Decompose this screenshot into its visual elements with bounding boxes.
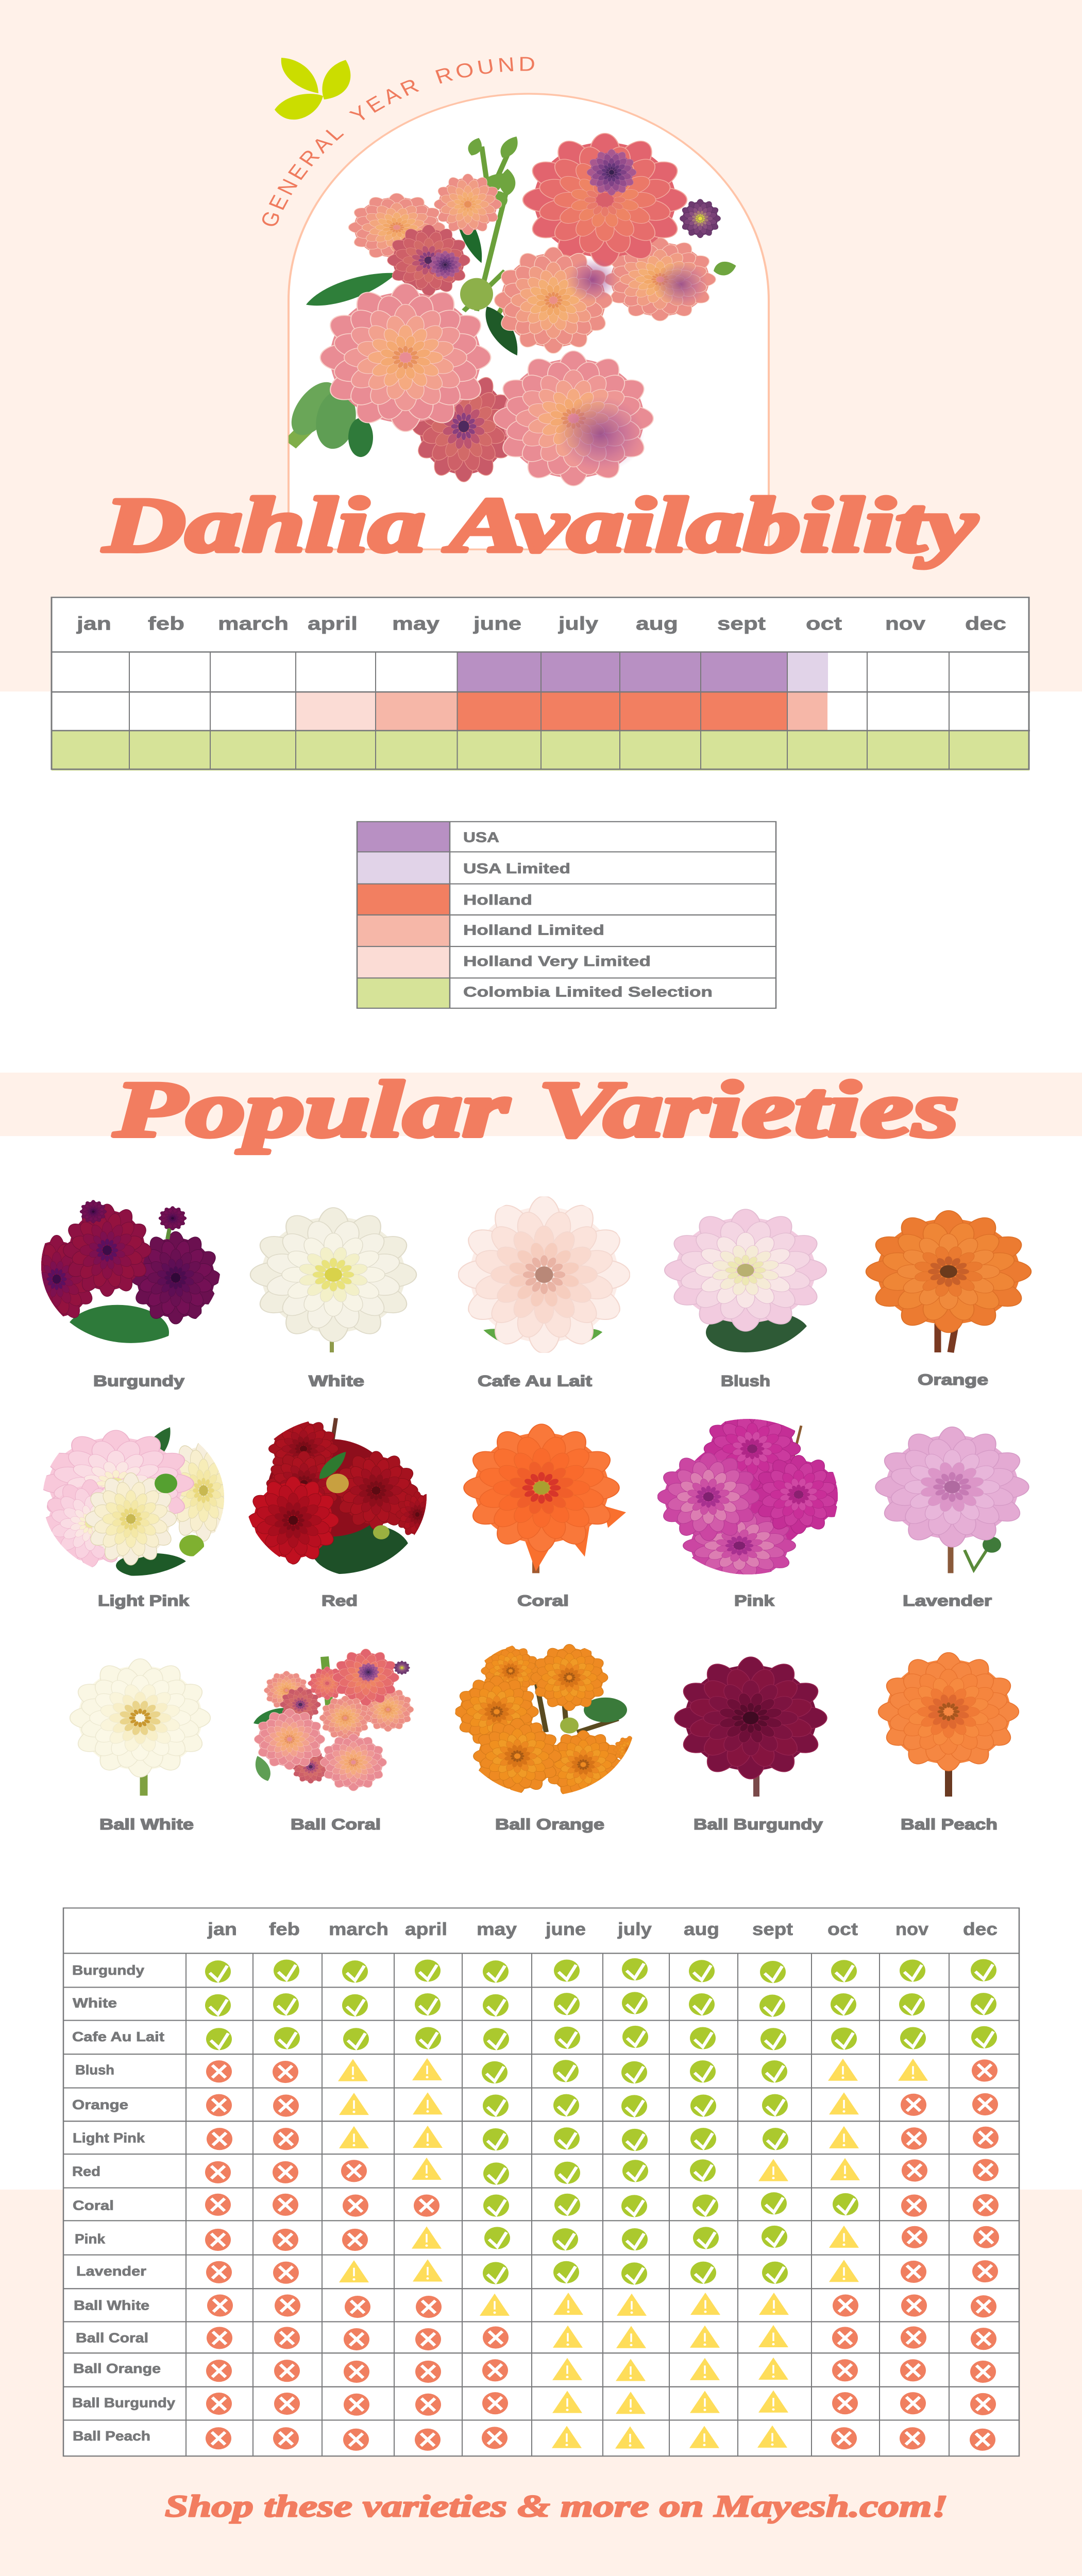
calendar month labels: jan [76, 614, 111, 634]
variety: pink: Pink [734, 1592, 774, 1609]
variety: pink [657, 1419, 838, 1606]
variety: cafe au lait: Cafe Au Lait [478, 1372, 593, 1389]
variety: red [247, 1418, 439, 1609]
variety: ball coral [251, 1649, 415, 1833]
variety: light pink: Light Pink [98, 1592, 189, 1609]
row: red: Red [72, 2164, 100, 2179]
legend labels: USA Limited [463, 861, 570, 876]
calendar month labels: april [308, 614, 358, 634]
variety: orange [866, 1210, 1032, 1388]
legend labels: Colombia Limited Selection [463, 984, 713, 1000]
variety: burgundy [41, 1200, 220, 1390]
row: pink [75, 2226, 999, 2251]
heading: popular varieties: Popular Varieties [113, 1065, 959, 1154]
variety: cafe au lait [458, 1196, 630, 1389]
table month labels: aug [684, 1919, 719, 1939]
calendar colour blocks [52, 652, 1029, 771]
calendar month labels: nov [885, 614, 925, 634]
variety: lavender [875, 1427, 1029, 1609]
table month labels: feb [269, 1919, 300, 1939]
variety: ball peach: Ball Peach [901, 1816, 998, 1833]
variety: orange: Orange [918, 1371, 988, 1388]
variety: ball peach [875, 1650, 1022, 1833]
variety: burgundy: Burgundy [93, 1372, 184, 1389]
calendar month labels: feb [148, 614, 184, 634]
row: white: White [73, 1995, 117, 2010]
row: ball orange: Ball Orange [73, 2361, 161, 2376]
variety: ball orange: Ball Orange [495, 1816, 604, 1833]
row: ball burgundy [72, 2391, 996, 2416]
row: cafe au lait: Cafe Au Lait [72, 2029, 164, 2044]
variety: light pink [43, 1427, 224, 1609]
row: burgundy: Burgundy [72, 1963, 144, 1977]
calendar month labels: july [558, 614, 598, 634]
icon: green leaves logo [275, 58, 350, 120]
row: coral [73, 2192, 999, 2217]
variety: white: White [309, 1372, 364, 1389]
table month labels: april [405, 1919, 447, 1939]
table month labels: jan [207, 1919, 237, 1939]
row: orange: Orange [72, 2097, 128, 2112]
curved text: general year round: GENERAL YEAR ROUND [262, 57, 534, 226]
row: ball white: Ball White [74, 2298, 149, 2313]
availability calendar table [52, 597, 1030, 771]
variety: blush: Blush [721, 1372, 770, 1389]
variety availability table [63, 1908, 1019, 2456]
hero flower bouquet [282, 133, 738, 489]
row: red [72, 2158, 999, 2185]
table month labels: may [477, 1919, 517, 1939]
row: ball orange [73, 2358, 996, 2383]
calendar month labels: aug [636, 614, 678, 634]
variety: white [250, 1208, 417, 1389]
variety: ball orange [453, 1642, 647, 1833]
row: light pink [73, 2126, 999, 2151]
variety: blush [664, 1209, 827, 1389]
variety: ball burgundy [674, 1657, 827, 1833]
row: cafe au lait [72, 2026, 997, 2050]
variety: lavender: Lavender [903, 1592, 992, 1609]
table month labels: nov [895, 1919, 928, 1939]
variety: red: Red [322, 1592, 358, 1609]
table month labels: july [617, 1919, 652, 1939]
table month labels: oct [827, 1919, 858, 1939]
row: ball peach: Ball Peach [73, 2429, 150, 2444]
row: lavender: Lavender [76, 2264, 146, 2279]
page background: top peach panel [0, 0, 1082, 691]
row: blush [75, 2058, 998, 2083]
row: coral: Coral [73, 2198, 114, 2213]
row: ball coral [76, 2325, 996, 2350]
calendar month labels: june [473, 614, 521, 634]
variety: ball white [66, 1656, 214, 1833]
row: white [73, 1992, 996, 2017]
legend labels [463, 829, 713, 1000]
legend labels: Holland Limited [463, 923, 604, 938]
legend labels: Holland Very Limited [463, 954, 651, 969]
variety: coral [464, 1424, 626, 1609]
row: lavender [76, 2259, 998, 2284]
table month labels: june [545, 1919, 586, 1939]
row: orange [72, 2092, 998, 2117]
row: ball burgundy: Ball Burgundy [72, 2395, 175, 2410]
legend [357, 822, 776, 1008]
table month labels: march [329, 1919, 388, 1939]
title: dahlia availability: Dahlia Availability [102, 482, 977, 568]
row: ball peach [73, 2426, 995, 2451]
row: blush: Blush [75, 2063, 114, 2077]
hero arch [289, 94, 769, 549]
row: burgundy [72, 1958, 996, 1983]
calendar month labels: sept [717, 614, 766, 634]
calendar month labels [76, 614, 1006, 634]
row: pink: Pink [75, 2231, 105, 2246]
variety: ball white: Ball White [99, 1816, 194, 1833]
legend labels: Holland [463, 892, 532, 908]
popular varieties band [0, 1073, 1082, 1136]
table month labels: sept [752, 1919, 793, 1939]
table month labels: dec [963, 1919, 998, 1939]
legend labels: USA [463, 829, 499, 845]
calendar month labels: may [392, 614, 439, 634]
calendar month labels: march [218, 614, 289, 634]
bottom peach panel [0, 2190, 1082, 2576]
row: ball coral: Ball Coral [76, 2330, 148, 2345]
call to action: Shop these varieties & more on Mayesh.com! [165, 2489, 948, 2523]
row: ball white [74, 2293, 996, 2318]
calendar month labels: oct [806, 614, 842, 634]
variety: coral: Coral [517, 1592, 569, 1609]
row: light pink: Light Pink [73, 2131, 145, 2145]
table month labels [207, 1919, 998, 1939]
variety: ball coral: Ball Coral [291, 1816, 381, 1833]
calendar month labels: dec [965, 614, 1006, 634]
variety: ball burgundy: Ball Burgundy [694, 1816, 823, 1833]
